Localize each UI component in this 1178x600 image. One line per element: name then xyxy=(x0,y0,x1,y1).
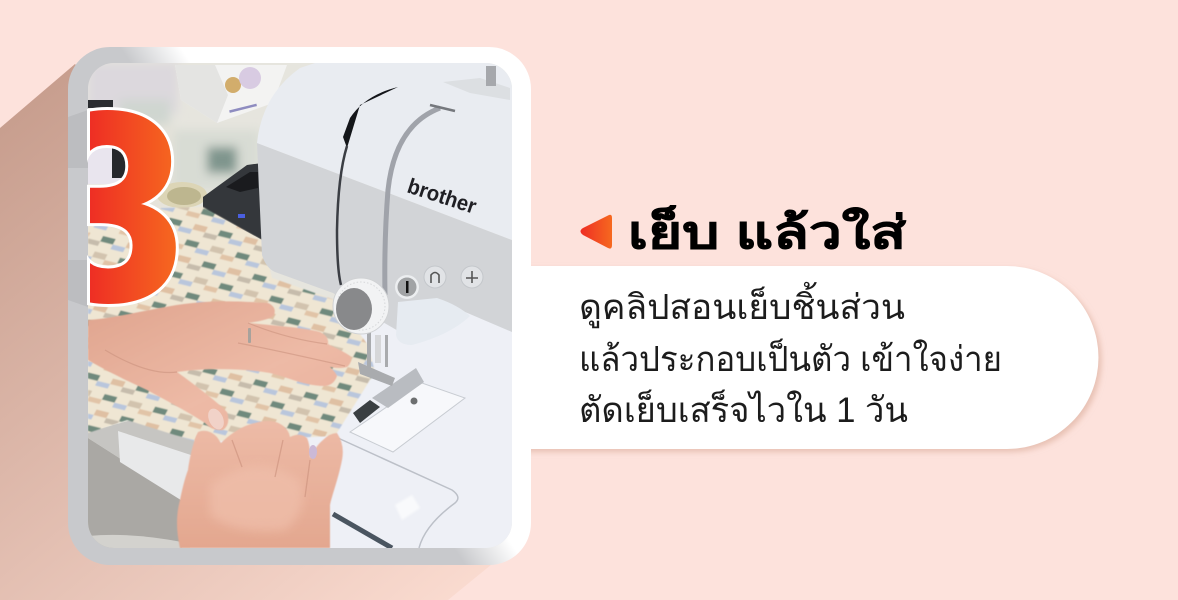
finger shadow lines xyxy=(232,440,310,497)
numeral outline: 3 xyxy=(35,59,182,355)
machine lamp lump xyxy=(396,298,465,332)
fingernail tint xyxy=(309,445,317,459)
presser foot xyxy=(358,332,395,386)
upper hand xyxy=(88,301,351,432)
white sewing table xyxy=(220,312,512,548)
dark charger xyxy=(203,163,262,240)
machine upper body xyxy=(257,63,512,240)
charger led xyxy=(238,214,245,218)
ruler markings xyxy=(333,514,392,548)
fingernails xyxy=(205,406,227,432)
numeral 3 xyxy=(35,59,182,355)
fabric with check pattern xyxy=(88,207,375,442)
plate screw xyxy=(410,398,418,404)
body text: ดูคลิปสอนเย็บชิ้นส่วน xyxy=(579,281,905,328)
finger separations xyxy=(105,323,345,373)
groove cap xyxy=(430,105,455,111)
thread slot line xyxy=(337,146,347,285)
object behind numeral xyxy=(88,100,126,184)
inner tape ring xyxy=(167,187,201,205)
panel: description pill xyxy=(520,266,1098,449)
charger slot xyxy=(226,172,258,192)
pill shape xyxy=(520,266,1098,449)
blurred workspace background xyxy=(88,63,512,548)
thread box xyxy=(175,65,287,123)
icon: gradient triangle pointer xyxy=(580,215,612,249)
lower hand xyxy=(177,421,343,548)
tape ring xyxy=(157,182,207,208)
metal needle plate xyxy=(372,368,424,408)
floor highlight xyxy=(88,535,182,548)
dark fabric edge xyxy=(353,400,380,423)
hand wheel dial xyxy=(333,278,389,334)
bed cover outline xyxy=(338,438,458,548)
grey floor under table xyxy=(88,438,182,548)
numeral shadow bands on frame xyxy=(68,110,88,307)
knuckle highlight xyxy=(210,466,303,531)
needle cover plate xyxy=(350,383,465,452)
logo: brother xyxy=(404,174,480,219)
photo: sewing machine xyxy=(88,63,512,548)
long shadow of photo card xyxy=(0,64,497,600)
tension groove xyxy=(385,108,440,295)
numeral fill: 3 xyxy=(35,59,182,355)
button: reverse xyxy=(424,266,446,288)
body text xyxy=(579,281,1002,430)
spool pin xyxy=(486,66,496,86)
body text: ตัดเย็บเสร็จไวใน 1 วัน xyxy=(579,389,908,430)
button: start xyxy=(461,266,483,288)
table front edge xyxy=(88,420,194,458)
button: needle up xyxy=(395,275,419,299)
top thread guide xyxy=(443,78,510,100)
panel: photo card frame xyxy=(68,47,531,565)
machine lower arm xyxy=(257,143,512,332)
table front face highlight xyxy=(118,431,191,500)
bed cover highlight xyxy=(396,497,418,518)
body text: แล้วประกอบเป็นตัว เข้าใจง่าย xyxy=(579,338,1002,379)
thread path dark slot xyxy=(343,87,398,148)
heading xyxy=(580,205,907,258)
heading text: เย็บ แล้วใส่ xyxy=(628,205,907,258)
ring xyxy=(248,328,251,343)
